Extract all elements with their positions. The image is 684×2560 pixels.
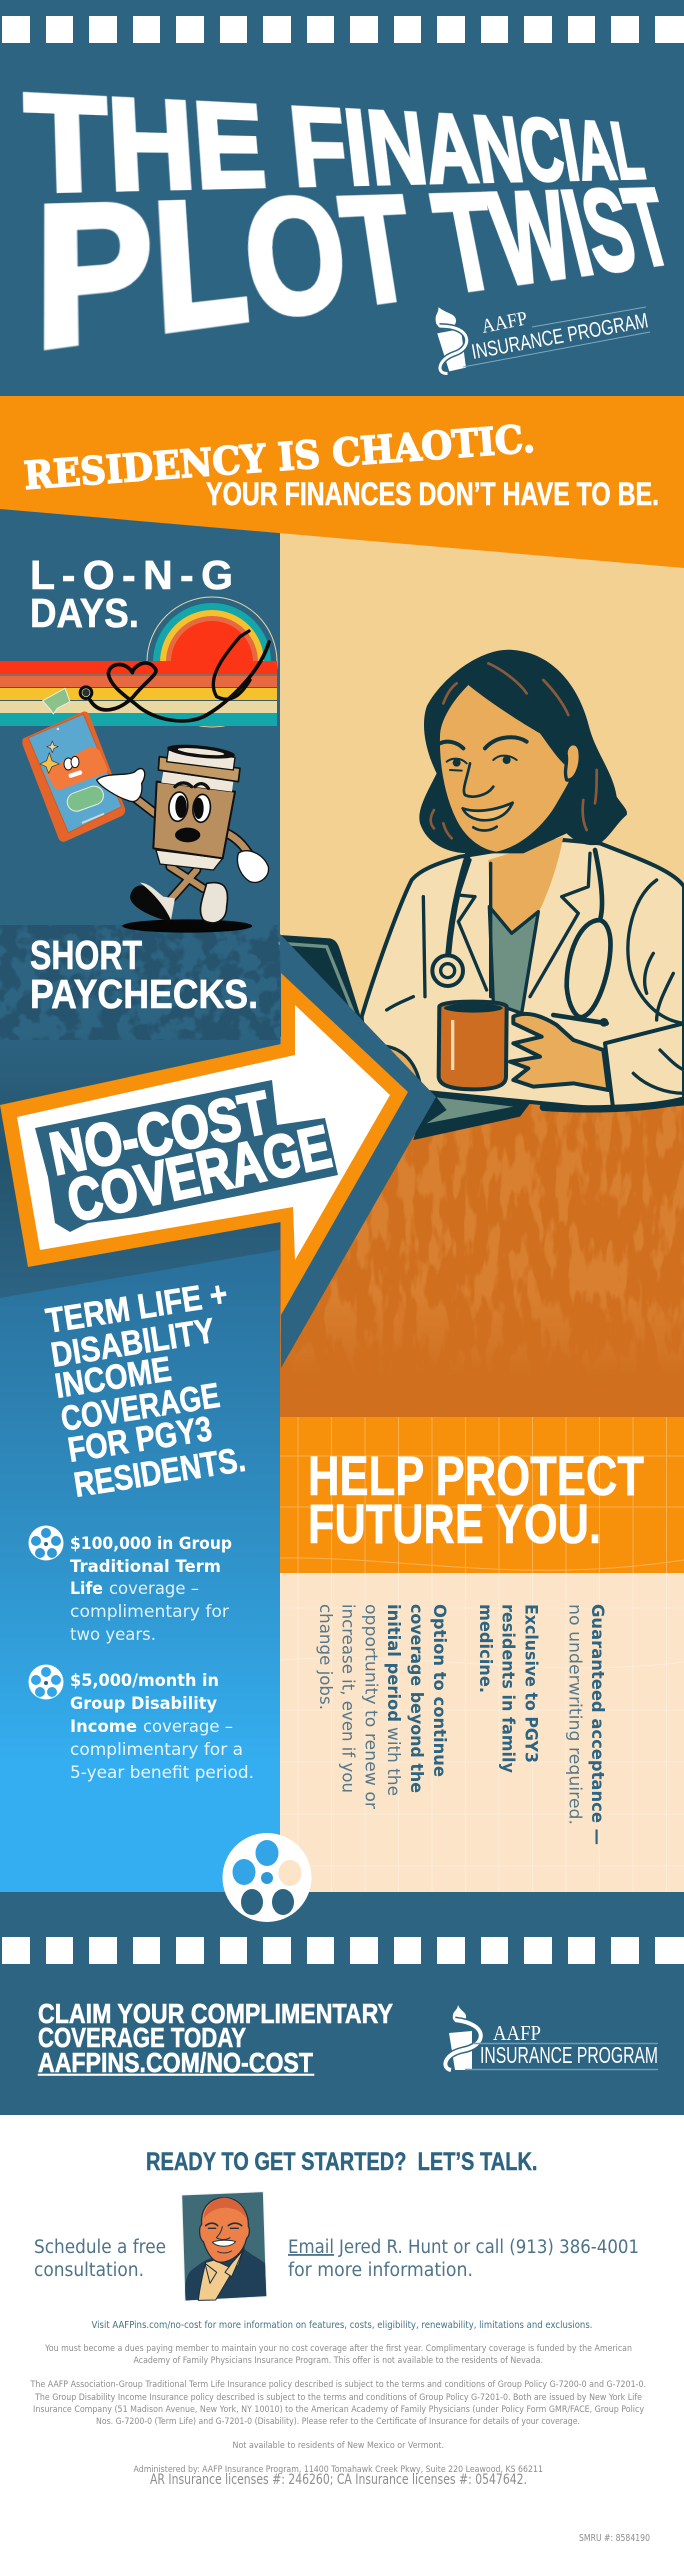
text block: exclusive to pgy3: medicine. <box>475 1604 495 1693</box>
icon: film reel <box>28 1664 64 1700</box>
text: term life benefit: two years. <box>70 1625 156 1645</box>
text: fine print: Nos. G-7200-0 (Term Life) and G-7201-0 (Disability). Please refer to the Certificate of Insurance for details of your coverage. <box>96 2417 580 2427</box>
text block: guaranteed acceptance: no underwriting required. <box>564 1604 584 1825</box>
icon: phone <box>22 711 125 842</box>
text: schedule a free consultation: consultation. <box>34 2260 144 2281</box>
bullet: disability income <box>28 1664 254 1783</box>
illustration: retro rainbow and stripes <box>0 597 277 727</box>
text: term life benefit: Traditional Term <box>70 1557 221 1577</box>
text block: option to continue: change jobs. <box>315 1604 335 1710</box>
heading: residency is chaotic: RESIDENCY IS CHAOTIC. <box>22 416 536 498</box>
panel: benefits cream section <box>280 1573 684 1893</box>
text block: guaranteed acceptance: Guaranteed acceptance — <box>587 1604 607 1845</box>
film strip: bottom <box>2 1937 684 1964</box>
text: fine print: AR Insurance licenses #: 246260; CA Insurance licenses #: 0547642. <box>150 2472 527 2488</box>
icon: film reel <box>28 1526 64 1560</box>
heading: long days: DAYS. <box>30 590 139 636</box>
text: fine print: Administered by: AAFP Insurance Program, 11400 Tomahawk Creek Pkwy, Suite 220 Leawood, KS 66211 <box>134 2465 543 2475</box>
text block: exclusive to pgy3: residents in family <box>498 1604 518 1773</box>
text block: guaranteed acceptance <box>564 1604 607 1845</box>
heading: help protect future you: FUTURE YOU. <box>308 1492 601 1555</box>
call to action: claim your coverage: COVERAGE TODAY <box>38 2022 246 2053</box>
text: disability benefit: complimentary for a <box>70 1740 243 1760</box>
heading: short paychecks <box>30 932 258 1017</box>
heading: ready to get started: READY TO GET STARTED? LET’S TALK. <box>146 2148 538 2176</box>
text block: option to continue: Option to continue <box>429 1604 449 1777</box>
heading: short paychecks: PAYCHECKS. <box>30 971 258 1017</box>
text: no-cost coverage: NO-COST <box>44 1079 275 1188</box>
panel: left column lower blue <box>0 1250 280 1892</box>
bullet: term life <box>28 1526 232 1645</box>
text: disability benefit <box>70 1671 254 1783</box>
text: disability benefit: Group Disability <box>70 1694 217 1714</box>
panel: help protect orange section <box>280 1417 684 1573</box>
text: disability benefit: coverage – <box>143 1717 233 1737</box>
text block: option to continue: increase it, even if you <box>338 1604 358 1793</box>
panel: doctor background <box>280 500 684 1200</box>
footer band <box>0 1892 684 2115</box>
icon: large film reel <box>222 1833 312 1922</box>
text: email or call: Email <box>288 2237 334 2258</box>
text block: exclusive to pgy3 <box>475 1604 540 1773</box>
icon: coffee cup mascot <box>97 742 269 933</box>
heading: term life and disability: FOR PGY3 <box>65 1409 215 1470</box>
text: schedule a free consultation: Schedule a free <box>34 2237 166 2258</box>
text block: option to continue: opportunity to renew or <box>360 1604 380 1809</box>
text: disability benefit: 5-year benefit period. <box>70 1763 254 1783</box>
text: fine print: Not available to residents of New Mexico or Vermont. <box>232 2441 444 2451</box>
text: no-cost coverage: COVERAGE <box>62 1113 337 1235</box>
logo: footer AAFP insurance program <box>445 2005 658 2070</box>
heading: term life and disability: RESIDENTS. <box>71 1440 248 1505</box>
illustration: stethoscope heart, phone and coffee cup mascot <box>22 631 269 933</box>
heading: help protect future you <box>308 1444 644 1555</box>
icon: stethoscope <box>79 631 269 721</box>
logo: header AAFP insurance program: AAFP <box>480 308 529 338</box>
text: email or call <box>288 2237 639 2281</box>
call to action: claim your coverage: CLAIM YOUR COMPLIMENTARY <box>38 1998 393 2029</box>
icon: money bubble <box>43 688 70 714</box>
text: fine print: Academy of Family Physicians Insurance Program. This offer is not available to the residents of Nevada. <box>134 2356 543 2366</box>
text block: option to continue <box>315 1604 449 1809</box>
heading: long days: L - O - N - G <box>30 552 233 598</box>
text: term life benefit: complimentary for <box>70 1602 229 1622</box>
heading: short paychecks: SHORT <box>30 932 142 978</box>
text: schedule a free consultation <box>34 2237 166 2281</box>
heading: term life and disability: INCOME <box>52 1349 174 1406</box>
text: email or call: for more information. <box>288 2260 473 2281</box>
text block: exclusive to pgy3: Exclusive to PGY3 <box>520 1604 540 1763</box>
panel: left column upper <box>0 500 280 1310</box>
heading: term life and disability: DISABILITY <box>48 1311 217 1375</box>
portrait: Jered R. Hunt <box>182 2192 267 2301</box>
text: no-cost coverage <box>35 1079 338 1235</box>
text: term life benefit: coverage – <box>109 1579 199 1599</box>
call to action: claim your coverage <box>38 1998 393 2078</box>
film strip: top <box>2 16 684 43</box>
heading: term life and disability: TERM LIFE + <box>43 1274 230 1341</box>
heading: term life and disability: COVERAGE <box>58 1376 222 1439</box>
text: term life benefit: Life <box>70 1579 103 1599</box>
illustration: doctor with coffee mug and laptop <box>280 650 684 1140</box>
heading: term life and disability <box>43 1274 248 1505</box>
text: disability benefit: Income <box>70 1717 137 1737</box>
text block: option to continue: initial period <box>383 1604 403 1722</box>
banner: orange headline band <box>0 396 684 568</box>
header background <box>0 0 684 400</box>
text: term life benefit <box>70 1534 232 1645</box>
text block: option to continue: with the <box>383 1727 403 1796</box>
logo: footer AAFP insurance program: AAFP <box>493 2021 541 2045</box>
text: smru number: SMRU #: 8584190 <box>579 2533 650 2544</box>
text: visit aafpins disclosure: Visit AAFPins.com/no-cost for more information on features, costs, eligibility, renewability, limitations and exclusions. <box>92 2320 592 2331</box>
text: term life benefit: $100,000 in Group <box>70 1534 232 1554</box>
panel: table <box>280 1085 684 1420</box>
logo: header AAFP insurance program <box>434 305 650 374</box>
text: email or call: Jered R. Hunt or call (913) 386-4001 <box>338 2237 639 2258</box>
call to action: claim your coverage: AAFPINS.COM/NO-COST <box>38 2047 313 2078</box>
text block: option to continue: coverage beyond the <box>406 1604 426 1793</box>
heading: long days <box>30 552 233 636</box>
text: fine print <box>30 2344 646 2488</box>
text: disability benefit: $5,000/month in <box>70 1671 219 1691</box>
arrow: no-cost coverage <box>0 934 436 1368</box>
